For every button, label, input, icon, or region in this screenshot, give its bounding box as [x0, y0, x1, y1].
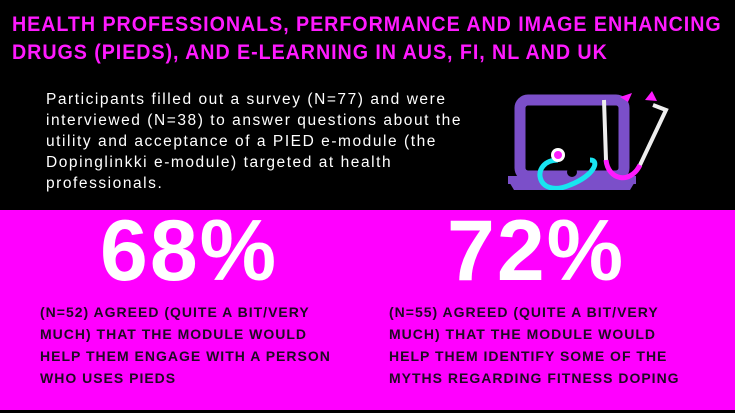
stat label right: MUCH) THAT THE MODULE WOULD	[389, 326, 656, 342]
intro text: Participants filled out a survey (N=77) and were interviewed (N=38) to answer questions about the utility and acceptance of a PIED e-module (the Dopinglinkki e-module) targeted at health professionals.	[46, 91, 462, 192]
stat label left: MUCH) THAT THE MODULE WOULD	[40, 326, 307, 342]
stat label right: HELP THEM IDENTIFY SOME OF THE	[389, 348, 667, 364]
stat label left: HELP THEM ENGAGE WITH A PERSON	[40, 348, 331, 364]
stat label right: (N=55) AGREED (QUITE A BIT/VERY	[389, 304, 659, 320]
stat: 68%: 68%	[100, 203, 278, 299]
icon: laptop with stethoscope	[508, 91, 669, 190]
stat label left: (N=52) AGREED (QUITE A BIT/VERY	[40, 304, 310, 320]
title: DRUGS (PIEDS), AND E-LEARNING IN AUS, FI, NL AND UK	[12, 41, 608, 64]
stat label left: WHO USES PIEDS	[40, 370, 176, 386]
stat label right	[389, 304, 680, 386]
stat label left	[40, 304, 331, 386]
title	[12, 13, 722, 64]
pink stats panel	[0, 210, 735, 410]
stat: 72%: 72%	[447, 203, 625, 299]
stat label right: MYTHS REGARDING FITNESS DOPING	[389, 370, 680, 386]
title: HEALTH PROFESSIONALS, PERFORMANCE AND IMAGE ENHANCING	[12, 13, 722, 36]
